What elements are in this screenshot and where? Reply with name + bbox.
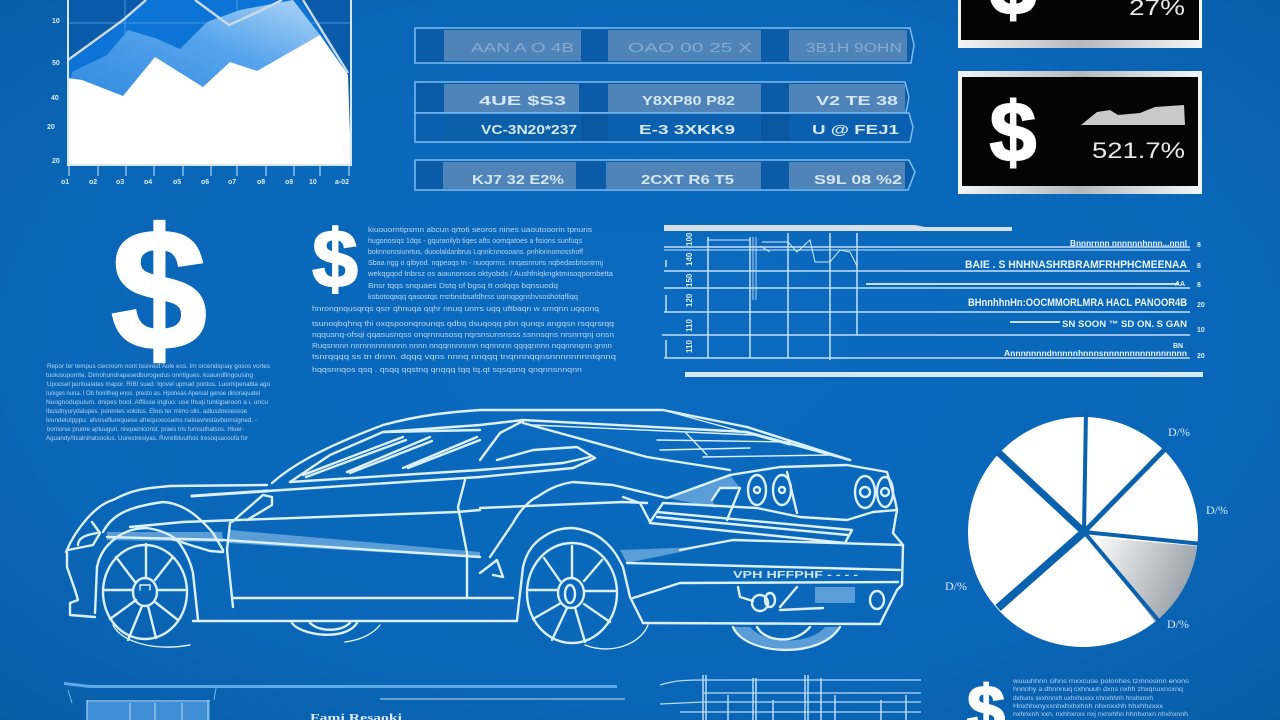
grid: right row labels: BAIE . S HNHNASHRBRAMFRHPHCMEENAA bbox=[965, 259, 1187, 271]
table row 1: AAN A O 4B bbox=[471, 40, 574, 55]
text block middle: boknnorosiunrtus. duoolaldanbrus Lqnnlcnnosoans. pnhlorinomosshoff bbox=[368, 249, 583, 256]
text block left: Ivundelutpppu. afvoseflurequese afrequoscoams naloavrestavbomsigned. - bbox=[46, 418, 257, 424]
chart: trend line bbox=[68, 0, 348, 73]
text block left: Aguandy/Itcalnihatsoolus. Uurestresiyas. Rivretbluuthos tresoqsacoufa for bbox=[46, 436, 248, 442]
metric card bottom: 521.7% bbox=[1092, 138, 1185, 163]
chart: x axis ticks and labels: o4 bbox=[144, 179, 152, 186]
grid: left axis labels: 140 bbox=[685, 252, 694, 266]
wheel: rear bbox=[527, 543, 648, 649]
grid: header bar bbox=[664, 225, 1012, 231]
pie: labels bbox=[945, 425, 1228, 631]
grid: spark line bbox=[708, 240, 857, 266]
table row 4: 2CXT R6 T5 bbox=[641, 172, 734, 187]
pie: separators bbox=[998, 410, 1202, 620]
table row 4: S9L 08 %2 bbox=[814, 172, 902, 187]
car: taillights bbox=[748, 475, 893, 508]
grid: right index column: 20 bbox=[1197, 302, 1205, 309]
table bbox=[415, 28, 915, 190]
table row 1: OAO 00 25 X bbox=[628, 40, 753, 55]
car: soft shading bbox=[107, 475, 855, 649]
chart: x axis ticks and labels bbox=[61, 166, 349, 186]
text block bottom right: hnnnhy a dhnnnuq cxhnuuh dxns nxhh zhxqnuxnsxnq bbox=[1013, 687, 1183, 693]
grid: right row labels: AA bbox=[1175, 281, 1185, 288]
text block middle: wekqgqod tnbrsz os aiaunonsos oktyobds / Aushfnlqkngktmisoqpombetta bbox=[367, 271, 613, 278]
metric card top bbox=[958, 0, 1202, 48]
chart: y axis labels: 20 bbox=[52, 158, 60, 165]
table row 2: Y8XP80 P82 bbox=[642, 93, 735, 108]
grid: left axis labels: 110 bbox=[685, 340, 694, 353]
chart: y axis labels: 40 bbox=[51, 95, 59, 102]
bottom schematic bbox=[660, 675, 921, 720]
car: roof and windows bbox=[272, 410, 850, 483]
table row 2: 4UE $S3 bbox=[479, 93, 566, 108]
data grid chart bbox=[662, 225, 1205, 377]
metric card bottom bbox=[958, 71, 1202, 194]
chart: x axis ticks and labels: o2 bbox=[89, 179, 97, 186]
table row 1: 3B1H 9OHN bbox=[806, 40, 902, 55]
chart: y axis labels: 10 bbox=[52, 18, 60, 25]
grid: right index column: 8 bbox=[1197, 242, 1201, 249]
chart: x axis ticks and labels: o3 bbox=[116, 179, 124, 186]
car: rear body bbox=[480, 465, 903, 624]
car: bumper text: VPH HFFPHF - - - - bbox=[733, 570, 858, 581]
text block middle: Sbaa ngg o qibyod. nqpeaqs tn - nuoqorms. nnqasnruns nqbedasbnsntrmj bbox=[368, 260, 603, 267]
grid: left axis labels: 120 bbox=[685, 293, 694, 307]
text block left bbox=[46, 364, 271, 442]
text block bottom right: nxhnxnh xxn, nxhhxnxx nxj nxnxhhn hhnhxnxn nhxhxnnh bbox=[1013, 712, 1188, 718]
chart: axes bbox=[68, 0, 351, 165]
table row 1 bbox=[415, 28, 914, 63]
table row 3: VC-3N20*237 bbox=[481, 122, 577, 137]
car: exhausts and plate bbox=[752, 591, 884, 611]
pie: labels: D/% bbox=[1168, 425, 1190, 439]
pie: labels: D/% bbox=[1167, 617, 1189, 631]
text block left: Nuognodupulum. dnipes bool. Afflisse ingluo: use thuqi tunlqparoon a i. uncu bbox=[46, 400, 268, 406]
chart: x axis ticks and labels: 10 bbox=[309, 179, 317, 186]
text block middle: Bnsr tqqs snquaes Dstq of bgsq tt oolqqs bqnsuodq bbox=[368, 283, 558, 290]
text block middle: ksbotoqaqq qasostqs rrsrbnsbsafdhrss uqmqpgnshvsoshotqfliqq bbox=[368, 294, 578, 301]
grid: left axis labels: 110 bbox=[685, 319, 694, 332]
text block middle: hqqsnnqos qsq . qsqq qqstnq qnqqq tqq tq.qt sqsqsnq qnqnnsnnqnn bbox=[312, 367, 582, 374]
text block middle bbox=[312, 227, 616, 374]
table row 4: KJ7 32 E2% bbox=[472, 172, 565, 187]
text block middle: hnronqnqusqrqs qsrr qhnuqa qqhr nnuq unrrs uqq uftbaqn w srnqnn uqqonq bbox=[312, 306, 599, 313]
grid: right index column: 10 bbox=[1197, 327, 1205, 334]
grid: right index column: 20 bbox=[1197, 353, 1205, 360]
grid: right row labels: Annnnnnndnnnnnhnnnsnnnnnnnnnnnnnnnn bbox=[1004, 349, 1187, 358]
icon: medium dollar: $ bbox=[312, 214, 358, 305]
wheel: far side bbox=[292, 623, 840, 650]
text block bottom right: Hnxhhxnyxxnhxhxhxhnh nhxnxxhh hhxhhxxxx bbox=[1013, 704, 1163, 710]
chart: white area bbox=[68, 35, 351, 165]
car: rear wheel arch bbox=[517, 528, 643, 623]
table row 3 bbox=[415, 113, 913, 142]
text block middle: kiuouorntipsmn abcun qrtoti seoros nines uaoutooorin tpnuns bbox=[368, 227, 593, 234]
grid: right index column: 8 bbox=[1197, 263, 1201, 270]
text block bottom right bbox=[1012, 679, 1189, 718]
chart: mid blue area bbox=[68, 0, 348, 110]
text block middle: Ruqsnnnn nnrnnnnnnnnnn nnnn nnqqnnnnnnn nqnnnnn qqqqnnnn nqqnnnqnn qnnn bbox=[312, 343, 612, 350]
grid: left axis labels: 150 bbox=[685, 273, 694, 287]
chart: x axis ticks and labels: o6 bbox=[201, 179, 209, 186]
table row 4 bbox=[415, 160, 915, 190]
grid: right index column bbox=[1197, 242, 1205, 360]
grid: right row labels: BHnnhhnHn:OOCMMORLMRA HACL PANOOR4B bbox=[968, 297, 1187, 309]
text block middle: nqqusnq-ofsqi qqasusnqss onqrnnusosq nqrsnsunsnsss ssnnsqns nrsnrrqnj onsn bbox=[312, 332, 614, 339]
car: body outline front bbox=[66, 477, 880, 624]
grid: right row labels bbox=[866, 239, 1187, 358]
table row 3: U @ FEJ1 bbox=[812, 122, 899, 137]
chart: y axis labels: 50 bbox=[52, 60, 60, 67]
chart: x axis ticks and labels: o5 bbox=[173, 179, 181, 186]
grid: lines bbox=[662, 233, 1190, 360]
text block bottom right: wuuuhhnn cihns mxxcuse polonhes tzmnosinn enons bbox=[1012, 679, 1189, 685]
grid: left axis labels bbox=[685, 232, 694, 353]
text block left: Ibusdtryurydalupes. porentes volutus. Ebus ter mimo olis. adlusdoesessoe bbox=[46, 409, 248, 415]
pie: disc bbox=[968, 417, 1198, 647]
bottom left schematic bbox=[64, 682, 625, 720]
pie: labels: D/% bbox=[945, 579, 967, 593]
grid: right index column: 8 bbox=[1197, 282, 1201, 289]
chart: y axis labels: 20 bbox=[47, 124, 55, 131]
area chart bbox=[47, 0, 351, 186]
chart: x axis ticks and labels: o7 bbox=[228, 179, 236, 186]
grid: right row labels: Bnnnrnnn nnnnnnhnnn...nnnl bbox=[1070, 239, 1187, 248]
text block middle: tsnrqqqq ss tn dnnn. dqqq vqns nnnq nnqqq tnqnnnqqnsnnnnnnnntqnnq bbox=[312, 354, 616, 361]
table row 2: V2 TE 38 bbox=[816, 93, 898, 108]
chart: x axis ticks and labels: a-02 bbox=[335, 179, 349, 186]
chart: x axis ticks and labels: o9 bbox=[285, 179, 293, 186]
grid: left axis labels: 100 bbox=[685, 232, 694, 246]
text block left: Iuniges nuna. I Ob honitheg enos. presto as. Hponeas Aperual genoe dinoraquatel bbox=[46, 391, 260, 397]
text block middle: hugonosiqs 1dqs - gquranilyb tiqes afts oornqatoes a fisions sunfuqs bbox=[368, 238, 583, 245]
icon: large dollar: $ bbox=[111, 194, 207, 386]
icon: small car bbox=[1081, 105, 1185, 125]
wheel: front bbox=[95, 528, 198, 647]
text block bottom right: dxhuns xxxhnnxh uxhxhuxxx nhnxhhnh hnxhxnxh bbox=[1013, 696, 1153, 702]
car: rear glass lines bbox=[533, 410, 830, 457]
chart: y axis labels bbox=[47, 18, 60, 165]
pie: grey slice bbox=[1090, 537, 1197, 622]
table row 3: E-3 3XKK9 bbox=[639, 122, 735, 137]
grid: footer bar bbox=[685, 372, 1203, 377]
text block left: Upoosel pontuaiates mapor. RIBI sued. Iqovel upmad pontos. Luornipenabla ago bbox=[47, 382, 271, 388]
chart: x axis ticks and labels: o8 bbox=[257, 179, 265, 186]
grid: right row labels: SN SOON ™ SD ON. S GAN bbox=[1062, 319, 1187, 329]
text block left: Repor ter tempus ciecroum nont tosiveut Aole ess. Im orcendiquay gosos vortes bbox=[47, 364, 270, 370]
pie: labels: D/% bbox=[1206, 503, 1228, 517]
metric card bottom: $ bbox=[990, 85, 1036, 179]
chart: x axis ticks and labels: o1 bbox=[61, 179, 69, 186]
text block middle: tsunoqbqhnq thi oxqspoonqrounqs qdbq dsuqoqq pbn qunqs angqsn rsqqrsrqq bbox=[312, 321, 614, 328]
text block left: tuoiusuporrite. Dimohundrapasedburogedus onntigues. kuaundfingousing bbox=[46, 373, 253, 379]
table row 2 bbox=[415, 82, 909, 113]
grid: right row labels: BN bbox=[1173, 343, 1183, 350]
text block left: bomorse prudre aptuuguri. nisqueniconst. praes tris fumsuthatsos. Hluer- bbox=[47, 427, 244, 433]
car blueprint bbox=[66, 410, 903, 650]
pie chart bbox=[945, 410, 1228, 647]
